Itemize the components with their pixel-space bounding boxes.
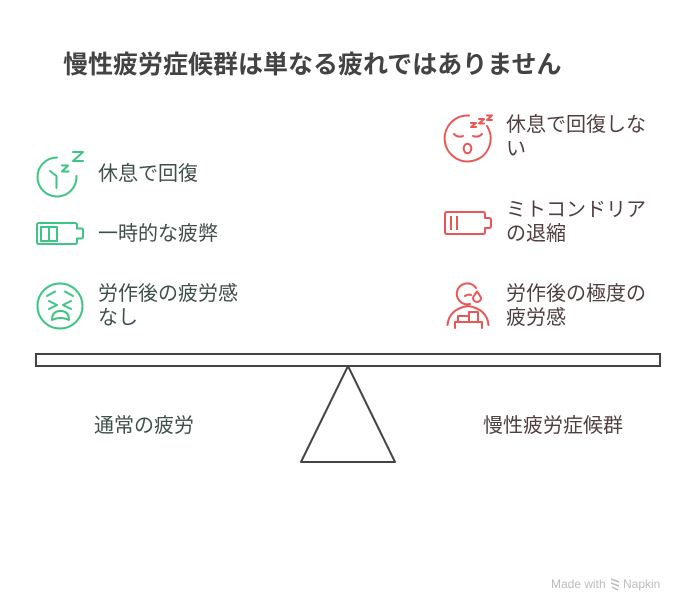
panel: normal fatigue items <box>37 152 238 329</box>
text: no post-exertional fatigue: なし <box>98 307 138 329</box>
icon: battery low <box>445 212 491 234</box>
icon: person with drop <box>448 283 488 328</box>
text: mitochondrial decline: ミトコンドリア <box>506 199 646 221</box>
text: temporary fatigue: 一時的な疲弊 <box>98 222 218 245</box>
title: 慢性疲労症候群は単なる疲れではありません <box>63 51 562 79</box>
text: rest does not recover: 休息で回復しな <box>506 113 646 136</box>
watermark: Napkin <box>623 577 660 591</box>
watermark: Made with <box>551 577 606 591</box>
icon: sleeping face <box>445 115 492 161</box>
icon: napkin logo <box>611 579 619 590</box>
panel: CFS items <box>445 113 646 329</box>
icon: clock with zzz <box>38 152 83 196</box>
seesaw beam <box>36 354 660 366</box>
text: rest recovers: 休息で回復 <box>98 162 198 185</box>
text: no post-exertional fatigue <box>98 282 238 329</box>
text: rest does not recover <box>506 113 646 160</box>
text: mitochondrial decline <box>506 199 646 245</box>
text: severe post-exertional fatigue: 疲労感 <box>506 306 566 329</box>
text: mitochondrial decline: の退縮 <box>506 222 566 245</box>
text: severe post-exertional fatigue <box>506 282 646 329</box>
label: normal fatigue: 通常の疲労 <box>94 414 194 437</box>
seesaw fulcrum <box>301 366 395 462</box>
text: severe post-exertional fatigue: 労作後の極度の <box>506 282 646 305</box>
watermark <box>551 577 660 591</box>
text: rest does not recover: い <box>506 138 526 160</box>
icon: tired face <box>38 284 82 328</box>
icon: battery half <box>37 223 83 244</box>
text: no post-exertional fatigue: 労作後の疲労感 <box>98 282 238 305</box>
label: chronic fatigue syndrome: 慢性疲労症候群 <box>483 414 623 437</box>
